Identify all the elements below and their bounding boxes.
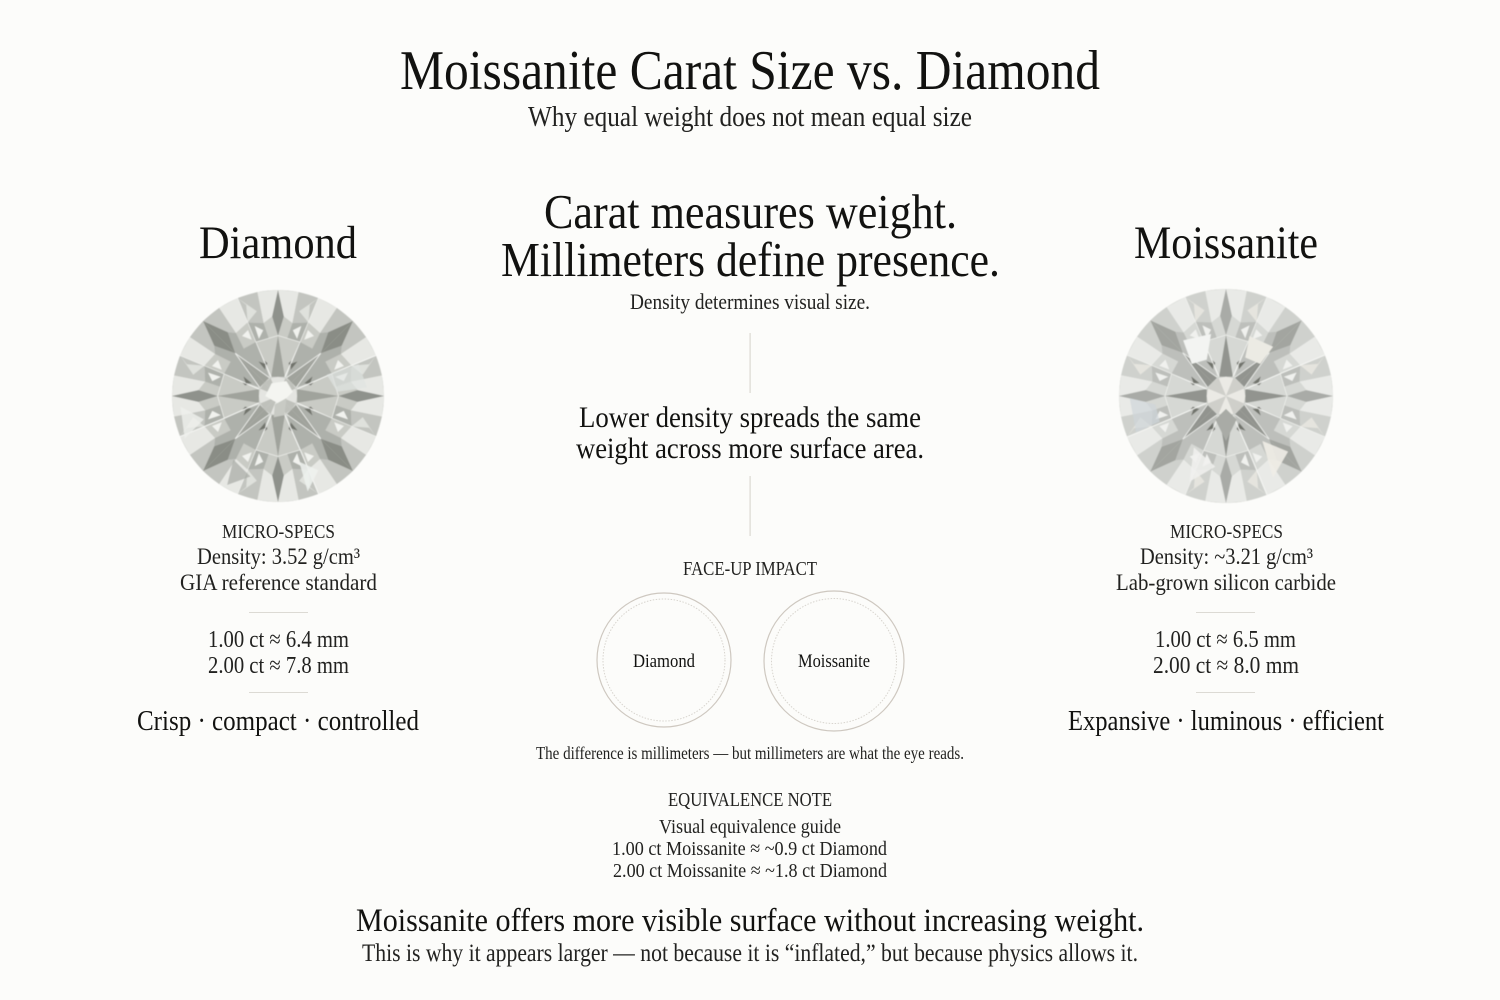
circle: moissanite outline: Moissanite <box>798 651 870 672</box>
carat to millimeter sizes: 2.00 ct ≈ 7.8 mm <box>208 653 349 679</box>
headline: Millimeters define presence. <box>501 232 1000 287</box>
micro-specs: Density: 3.52 g/cm³ <box>197 544 360 570</box>
panel: equivalence note: 2.00 ct Moissanite ≈ ~1.8 ct Diamond <box>613 860 887 882</box>
title <box>400 40 1100 133</box>
circle: moissanite outline <box>764 591 904 731</box>
descriptor: moissanite: Expansive · luminous · efficient <box>1068 705 1384 737</box>
carat to millimeter sizes: 1.00 ct ≈ 6.5 mm <box>1155 627 1296 653</box>
circle: diamond outline <box>597 593 731 727</box>
panel: equivalence note: EQUIVALENCE NOTE <box>668 789 832 811</box>
conclusion <box>356 903 1144 967</box>
panel: diamond <box>137 217 419 737</box>
icon: round brilliant moissanite <box>1119 289 1333 503</box>
carat to millimeter sizes: 1.00 ct ≈ 6.4 mm <box>208 627 349 653</box>
headline: Carat measures weight. <box>544 184 957 239</box>
supporting line: Density determines visual size. <box>630 289 870 314</box>
panel: face-up impact <box>536 558 964 763</box>
density explanation <box>576 401 924 465</box>
heading: diamond: Diamond <box>199 217 357 269</box>
subtitle: Why equal weight does not mean equal size <box>528 102 972 133</box>
micro-specs: MICRO-SPECS <box>1170 521 1283 543</box>
headline <box>501 184 1000 287</box>
panel: equivalence note <box>612 789 887 882</box>
carat to millimeter sizes <box>208 627 349 679</box>
carat to millimeter sizes <box>1153 627 1299 679</box>
main heading: Moissanite Carat Size vs. Diamond <box>400 40 1100 102</box>
density explanation: Lower density spreads the same <box>579 401 921 434</box>
caption: The difference is millimeters — but millimeters are what the eye reads. <box>536 743 964 763</box>
carat to millimeter sizes: 2.00 ct ≈ 8.0 mm <box>1153 653 1299 679</box>
circle: diamond outline: Diamond <box>633 651 695 672</box>
conclusion: This is why it appears larger — not because it is “inflated,” but because physics allows it. <box>362 938 1138 967</box>
icon: round brilliant diamond <box>172 290 384 502</box>
density explanation: weight across more surface area. <box>576 432 924 465</box>
micro-specs: MICRO-SPECS <box>222 521 335 543</box>
panel: center message <box>501 184 1000 536</box>
panel: moissanite <box>1068 217 1384 737</box>
micro-specs: GIA reference standard <box>180 570 377 596</box>
heading: face-up impact: FACE-UP IMPACT <box>683 558 817 580</box>
descriptor: diamond: Crisp · compact · controlled <box>137 705 419 737</box>
conclusion: Moissanite offers more visible surface without increasing weight. <box>356 903 1144 939</box>
micro-specs: Lab-grown silicon carbide <box>1116 570 1336 596</box>
micro-specs <box>180 521 377 596</box>
micro-specs <box>1116 521 1336 596</box>
panel: equivalence note: Visual equivalence guide <box>659 816 841 838</box>
micro-specs: Density: ~3.21 g/cm³ <box>1140 544 1313 570</box>
panel: equivalence note: 1.00 ct Moissanite ≈ ~0.9 ct Diamond <box>612 838 887 860</box>
heading: moissanite: Moissanite <box>1134 217 1318 269</box>
